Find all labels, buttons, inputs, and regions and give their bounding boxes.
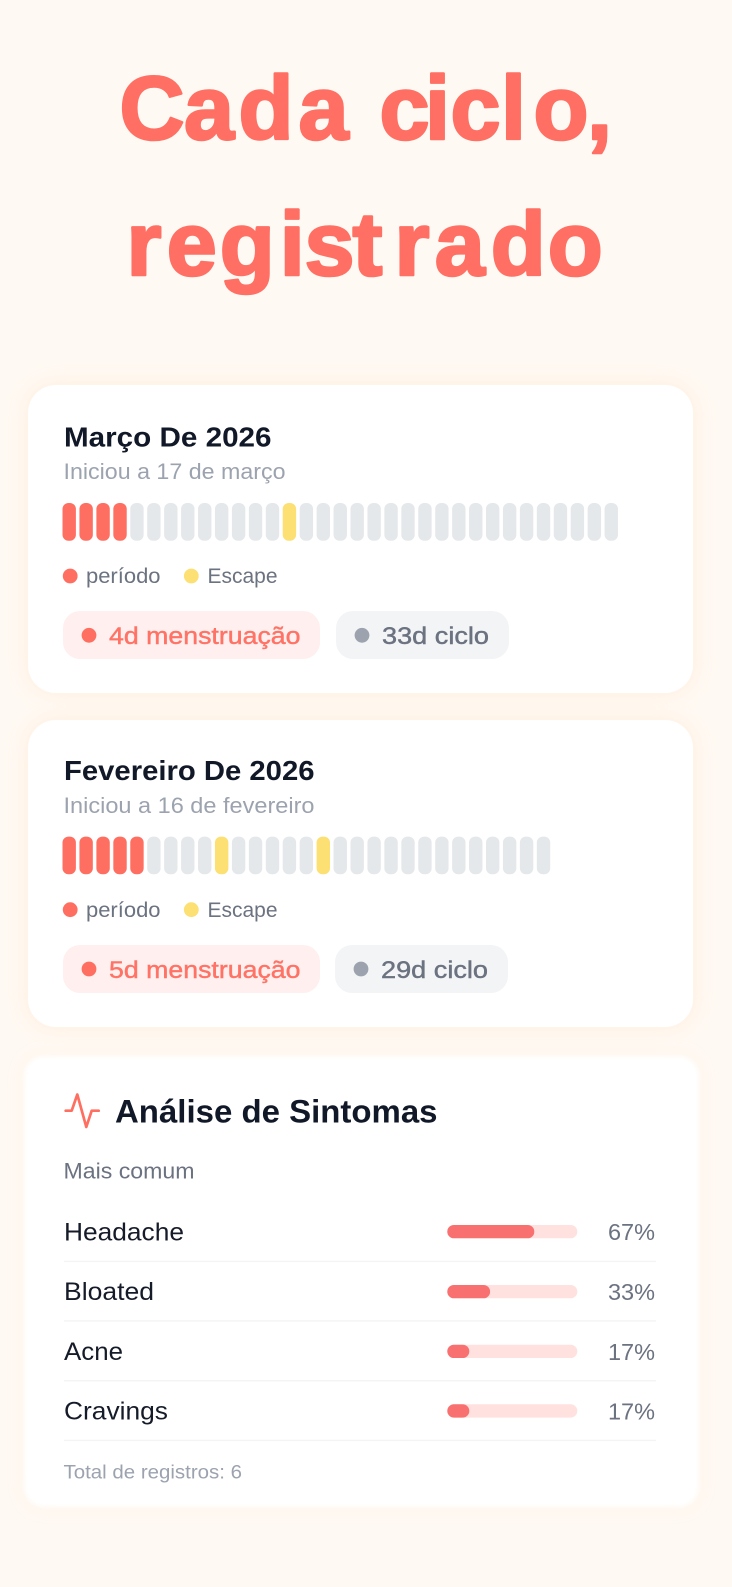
badge: cycle length February — [335, 945, 508, 993]
badge: cycle length February: 29d ciclo — [381, 957, 488, 984]
panel: February 2026 card — [28, 720, 693, 1027]
row: Cravings: 17% — [608, 1398, 655, 1424]
row: Cravings: Cravings — [64, 1398, 168, 1426]
panel: symptom analysis — [24, 1056, 699, 1507]
row: Acne: 17% — [608, 1339, 655, 1365]
badge: cycle length March: 33d ciclo — [382, 623, 489, 650]
card subtitle: March: Iniciou a 17 de março — [64, 459, 286, 484]
subheading: Mais comum — [64, 1158, 194, 1183]
legend: March — [63, 564, 278, 588]
card heading: February: Fevereiro De 2026 — [64, 755, 314, 786]
badge: menstruation length March — [63, 611, 320, 659]
legend: March: período — [86, 564, 161, 588]
badge: menstruation length February: 5d menstruação — [109, 957, 300, 984]
row: Headache: 67% — [608, 1219, 655, 1245]
title: registrado — [126, 195, 603, 295]
title: ciclo, — [380, 59, 612, 159]
row: Bloated — [64, 1278, 655, 1306]
title: Cada — [120, 59, 350, 159]
cycle day strip: March — [62, 503, 618, 541]
title — [120, 59, 612, 295]
card heading: March: Março De 2026 — [64, 422, 272, 452]
legend: February: Escape — [208, 898, 278, 922]
badge: menstruation length February — [63, 945, 320, 993]
card subtitle: February: Iniciou a 16 de fevereiro — [64, 793, 314, 818]
legend: February — [63, 898, 278, 922]
footer total: Total de registros: 6 — [64, 1462, 242, 1483]
row: Bloated: Bloated — [64, 1278, 154, 1306]
row: Acne — [64, 1338, 655, 1366]
row: Acne: Acne — [64, 1338, 123, 1366]
row: Bloated: 33% — [608, 1279, 655, 1305]
badge: menstruation length March: 4d menstruação — [109, 623, 300, 650]
legend: March: Escape — [208, 564, 278, 588]
icon: activity pulse — [66, 1094, 99, 1127]
panel heading: Análise de Sintomas — [115, 1093, 438, 1129]
legend: February: período — [86, 898, 161, 922]
cycle day strip: February — [62, 837, 550, 874]
row: Headache: Headache — [64, 1219, 184, 1247]
badge: cycle length March — [336, 611, 509, 659]
row: Headache — [64, 1219, 655, 1247]
panel: March 2026 card — [28, 385, 693, 693]
row: Cravings — [64, 1398, 655, 1426]
